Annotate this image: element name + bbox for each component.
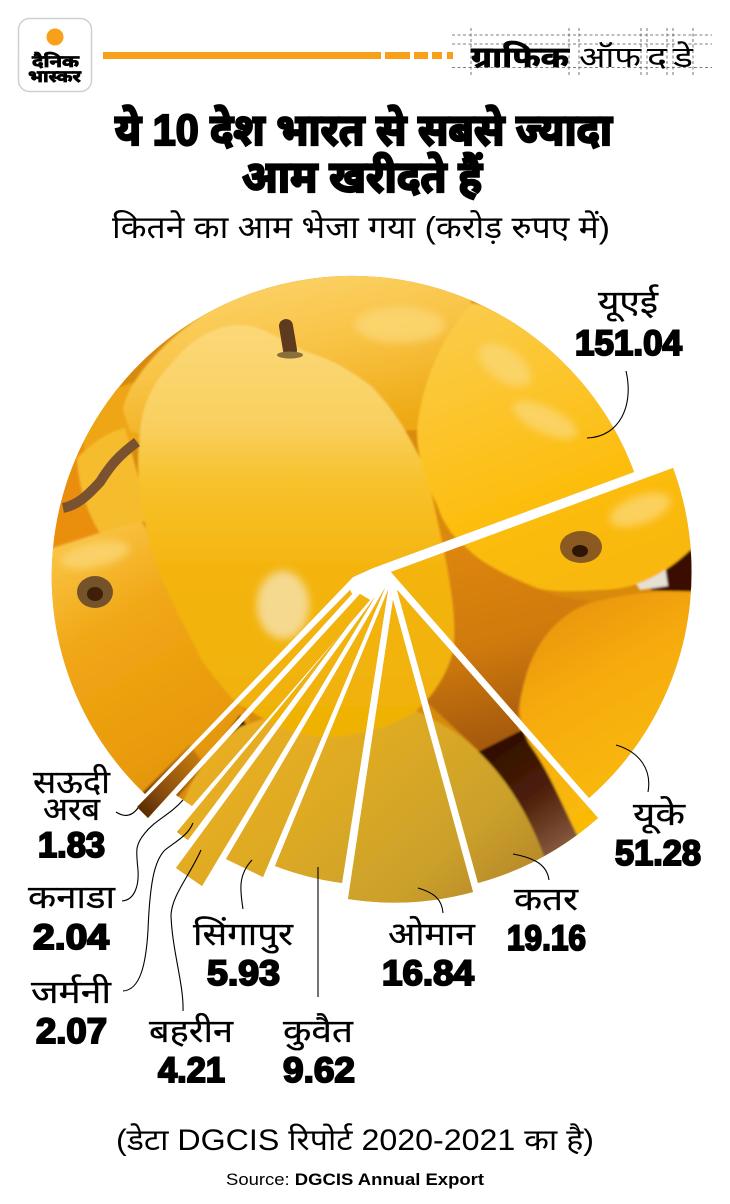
photo: far-left orange — [53, 440, 99, 548]
label: Bahrain: बहरीन — [149, 1013, 234, 1049]
label: Singapore: सिंगापुर — [193, 916, 294, 954]
photo: upper right mango — [417, 303, 710, 591]
label: UAE — [575, 284, 683, 438]
label: Germany: जर्मनी — [31, 974, 112, 1010]
label: Saudi Arabia — [33, 764, 138, 865]
label: Qatar: कतर — [514, 881, 579, 917]
label: Canada: कनाडा — [28, 879, 116, 915]
label: Bahrain — [149, 850, 234, 1090]
title: ये 10 देश भारत से सबसे ज्यादा — [115, 104, 613, 155]
title — [115, 104, 613, 202]
label: Qatar: 19.16 — [507, 919, 586, 958]
label: Saudi Arabia: अरब — [43, 791, 101, 827]
photo: dark shadow lower right — [478, 730, 578, 857]
label: Singapore: 5.93 — [207, 954, 280, 993]
label: UAE: 151.04 — [575, 324, 683, 363]
label: Singapore — [193, 860, 294, 993]
label: Canada: 2.04 — [33, 918, 110, 957]
label: Qatar — [507, 854, 586, 958]
label: UAE: यूएई — [598, 284, 659, 322]
label: UK — [615, 745, 701, 873]
label: Germany: 2.07 — [36, 1012, 107, 1051]
title: आम खरीदते हैं — [242, 151, 483, 202]
photo: small left mango — [77, 428, 150, 533]
header tag: graphic of the day: डे — [672, 41, 694, 74]
photo: dark seam under the big mango — [225, 714, 248, 738]
photo: far right mango — [520, 592, 700, 840]
label: Kuwait: 9.62 — [283, 1051, 355, 1090]
photo: back mango top — [122, 276, 473, 434]
photo: dark end of Saudi slice — [137, 745, 202, 818]
header tag: graphic of the day — [452, 28, 712, 75]
photo: middle orange mango — [427, 534, 588, 752]
header tag: graphic of the day: द — [647, 42, 668, 74]
note: data year: (डेटा DGCIS रिपोर्ट 2020-2021 का है) — [116, 1122, 594, 1157]
logo: Dainik Bhaskar — [18, 18, 92, 92]
label: Oman: 16.84 — [382, 954, 475, 993]
label: Kuwait: कुवैत — [283, 1013, 354, 1051]
label: Bahrain: 4.21 — [158, 1051, 225, 1090]
label: Saudi Arabia: 1.83 — [38, 826, 105, 865]
header tag: graphic of the day: ग्राफिक — [471, 41, 570, 74]
photo: dark gap right — [650, 548, 692, 593]
photo: stems and spots — [63, 326, 602, 608]
label: Canada — [28, 800, 183, 957]
label: Oman — [382, 888, 476, 993]
label: UK: यूके — [633, 796, 687, 834]
label: Kuwait — [283, 867, 355, 1090]
label: Oman: ओमान — [388, 916, 476, 952]
label: UK: 51.28 — [615, 834, 701, 873]
label: Saudi Arabia: सऊदी — [33, 764, 111, 800]
photo: pale skin streaks — [58, 307, 675, 574]
photo: big central mango — [138, 325, 454, 737]
header rule: orange dashed bar — [103, 52, 453, 59]
logo: Dainik Bhaskar: भास्कर — [28, 67, 82, 86]
source line: Source: DGCIS Annual Export — [226, 1170, 484, 1189]
logo: Dainik Bhaskar: दैनिक — [32, 50, 80, 71]
photo: lower-left mango — [40, 522, 250, 830]
subtitle: कितने का आम भेजा गया (करोड़ रुपए में) — [112, 210, 610, 245]
label: Germany — [31, 823, 193, 1051]
photo: bottom olive mango — [176, 710, 545, 903]
chart: mango photo pie split into ten slices — [52, 276, 692, 903]
header tag: graphic of the day: ऑफ — [579, 41, 642, 74]
